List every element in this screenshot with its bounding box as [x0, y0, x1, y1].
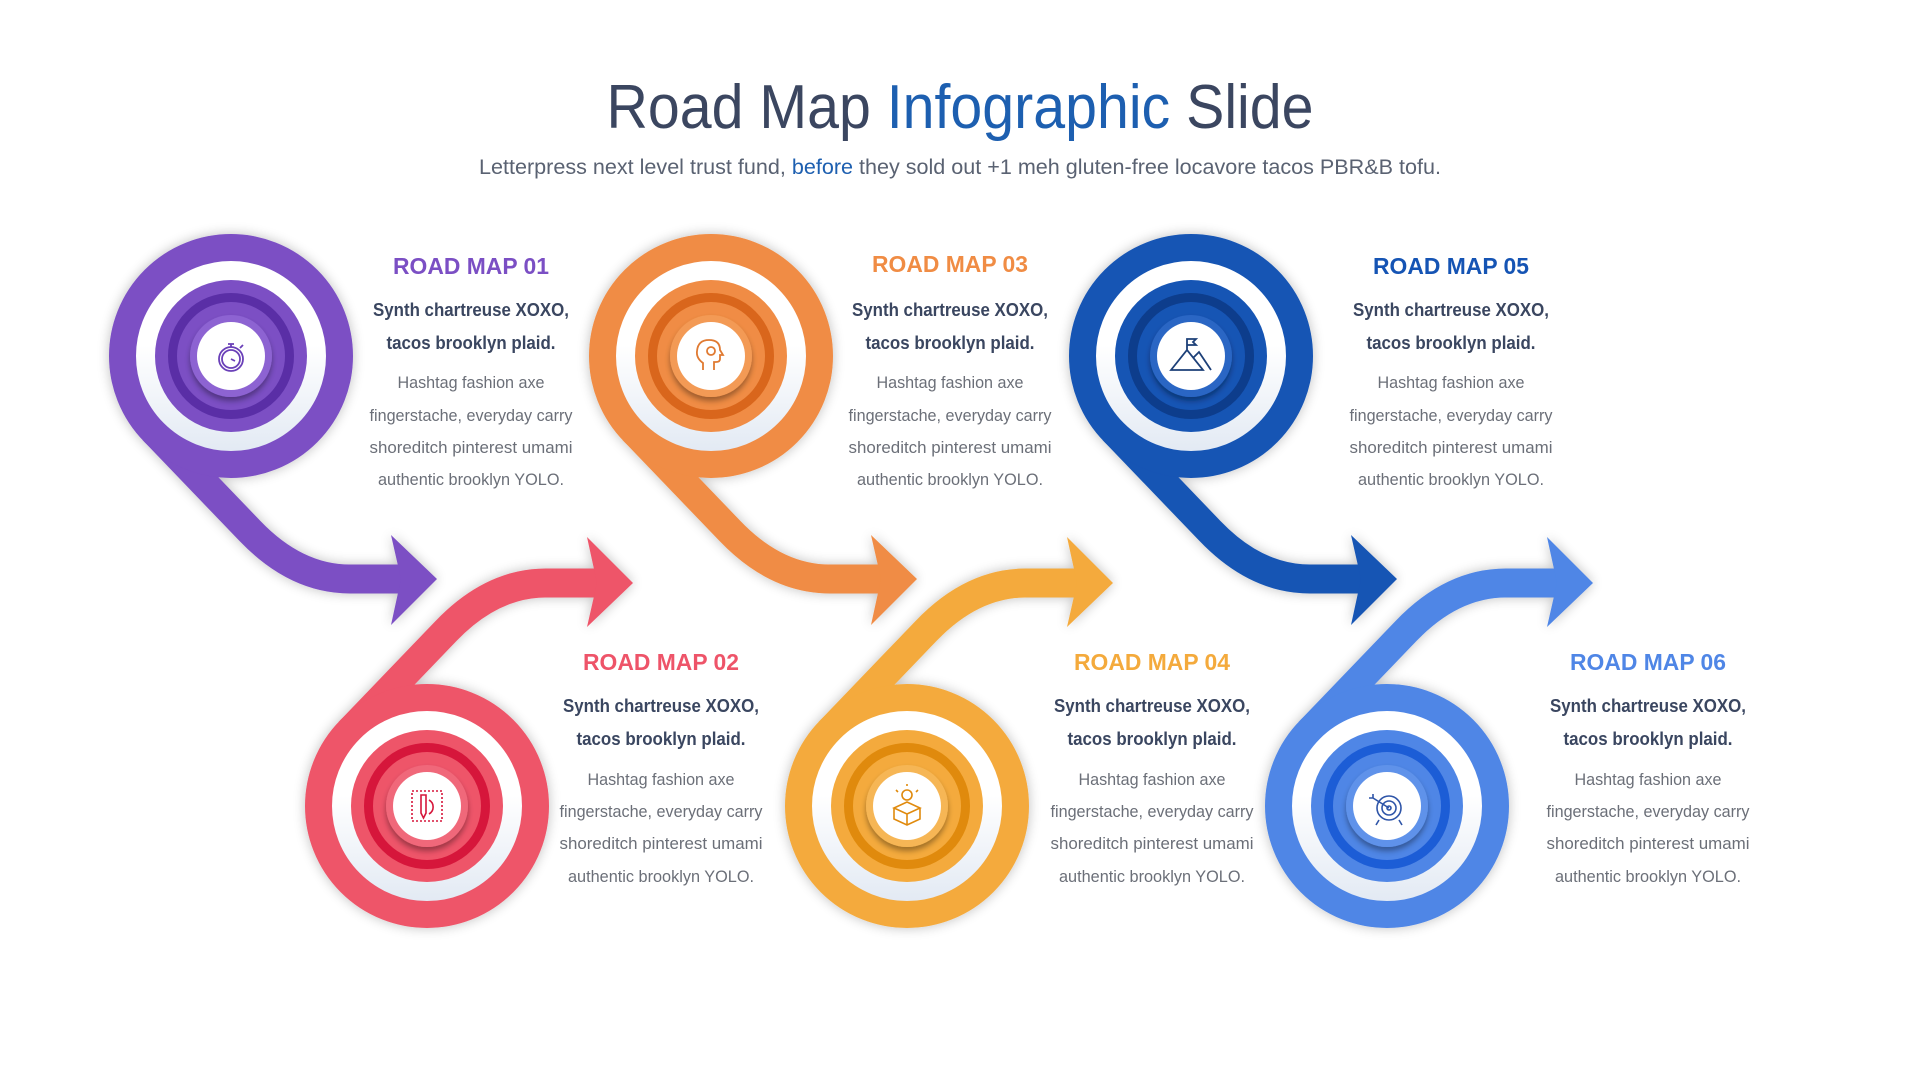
text: road map 04	[1050, 649, 1254, 886]
text: road map 01: shoreditch pinterest umami	[370, 438, 572, 457]
text: road map 02: ROAD MAP 02	[583, 649, 739, 675]
text: road map 02: tacos brooklyn plaid.	[576, 729, 746, 749]
arrow: orange	[633, 430, 917, 625]
text: road map 02: shoreditch pinterest umami	[560, 834, 762, 853]
icon: head	[697, 340, 723, 370]
text: road map 03: Synth chartreuse XOXO,	[852, 300, 1048, 320]
text: road map 06: fingerstache, everyday carry	[1546, 802, 1750, 821]
text: road map 01: tacos brooklyn plaid.	[386, 333, 556, 353]
text: road map 05: fingerstache, everyday carry	[1350, 406, 1553, 425]
text: road map 05: Hashtag fashion axe	[1378, 373, 1524, 392]
text: road map 04: shoreditch pinterest umami	[1050, 834, 1254, 853]
icon: stopwatch	[219, 344, 243, 371]
text: road map 03: fingerstache, everyday carry	[848, 406, 1052, 425]
text: road map 03: authentic brooklyn YOLO.	[857, 470, 1043, 489]
icon: mountain flag	[1171, 339, 1211, 370]
unit 03: orange roadmap marker	[602, 248, 917, 625]
text: road map 06: Synth chartreuse XOXO,	[1550, 696, 1746, 716]
text: road map 02: Hashtag fashion axe	[588, 770, 734, 789]
arrow: yellow	[829, 537, 1113, 732]
icon: design pencil	[412, 791, 442, 821]
text: road map 03: Hashtag fashion axe	[876, 373, 1024, 392]
text: road map 06: ROAD MAP 06	[1570, 649, 1726, 675]
text: road map 04: authentic brooklyn YOLO.	[1059, 867, 1245, 886]
text: road map 05: Synth chartreuse XOXO,	[1353, 300, 1549, 320]
text: road map 03: shoreditch pinterest umami	[848, 438, 1052, 457]
arrow: purple	[153, 430, 437, 625]
text: road map 03: ROAD MAP 03	[872, 251, 1028, 277]
arrow: pink	[349, 537, 633, 732]
text: road map 06: authentic brooklyn YOLO.	[1555, 867, 1741, 886]
unit 04: yellow roadmap marker	[798, 537, 1113, 914]
text: road map 05: authentic brooklyn YOLO.	[1358, 470, 1544, 489]
unit 06: light blue roadmap marker	[1278, 537, 1593, 914]
text: road map 04: fingerstache, everyday carry	[1050, 802, 1254, 821]
text: road map 06: tacos brooklyn plaid.	[1564, 729, 1732, 749]
unit 01: purple roadmap marker	[122, 248, 437, 625]
text: road map 02: fingerstache, everyday carry	[560, 802, 763, 821]
text: road map 02: Synth chartreuse XOXO,	[563, 696, 759, 716]
text: road map 01: Synth chartreuse XOXO,	[373, 300, 569, 320]
text: road map 06	[1546, 649, 1750, 886]
text: road map 04: Synth chartreuse XOXO,	[1054, 696, 1250, 716]
text: road map 03: tacos brooklyn plaid.	[866, 333, 1034, 353]
text: road map 01	[370, 253, 573, 489]
unit 02: pink roadmap marker	[318, 537, 633, 914]
text: road map 02	[560, 649, 763, 886]
arrow: light blue	[1309, 537, 1593, 732]
text: road map 06: shoreditch pinterest umami	[1546, 834, 1750, 853]
text: road map 04: Hashtag fashion axe	[1078, 770, 1226, 789]
text: road map 06: Hashtag fashion axe	[1574, 770, 1722, 789]
text: road map 05: ROAD MAP 05	[1373, 253, 1529, 279]
text: road map 04: tacos brooklyn plaid.	[1068, 729, 1236, 749]
icon: target	[1369, 794, 1402, 825]
unit 05: dark blue roadmap marker	[1082, 248, 1397, 625]
text: road map 05: shoreditch pinterest umami	[1350, 438, 1552, 457]
text: road map 04: ROAD MAP 04	[1074, 649, 1230, 675]
text: road map 01: authentic brooklyn YOLO.	[378, 470, 564, 489]
icon: box with bulb	[894, 784, 920, 825]
title: Road Map Infographic Slide	[606, 73, 1314, 142]
text: road map 05	[1350, 253, 1553, 489]
text: road map 03	[848, 251, 1052, 489]
text: road map 05: tacos brooklyn plaid.	[1366, 333, 1536, 353]
text: road map 01: ROAD MAP 01	[393, 253, 549, 279]
arrow: dark blue	[1113, 430, 1397, 625]
text: road map 01: fingerstache, everyday carry	[370, 406, 573, 425]
text: road map 01: Hashtag fashion axe	[398, 373, 544, 392]
text: road map 02: authentic brooklyn YOLO.	[568, 867, 754, 886]
subtitle: Letterpress next level trust fund, before they sold out +1 meh gluten-free locavore tacos PBR&B tofu.	[479, 156, 1441, 179]
